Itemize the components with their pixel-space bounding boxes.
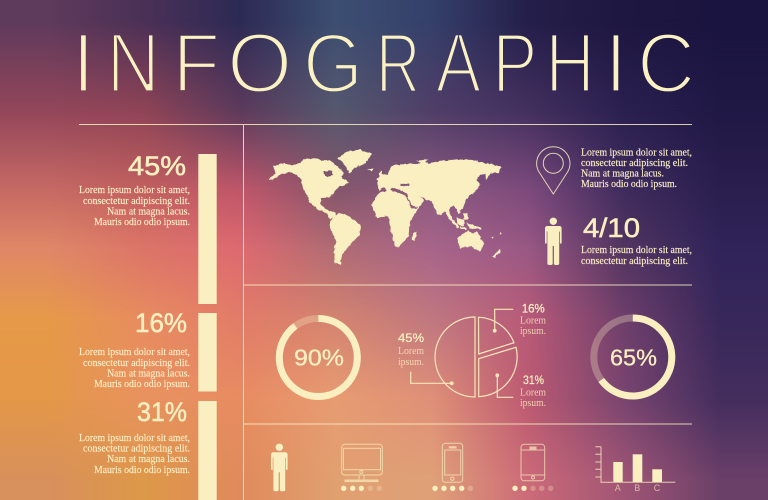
- text block: location: [581, 148, 692, 190]
- rating dots: phone: [432, 486, 473, 491]
- pie label 16%: Lorem: [520, 316, 546, 326]
- title: A: [436, 17, 481, 111]
- pie label 31%: 31%: [523, 373, 544, 387]
- icon: location pin: [537, 147, 570, 194]
- title: O: [227, 16, 292, 110]
- text block 31: consectetur adipiscing elit.: [83, 444, 190, 454]
- title: I: [72, 16, 95, 110]
- text block 16: Nam at magna lacus.: [107, 368, 190, 380]
- bar chart: C: [654, 483, 661, 493]
- bar 16: [198, 313, 217, 392]
- text block 16: [79, 347, 190, 390]
- panel: left percentages: [79, 151, 217, 500]
- donut 65%: [594, 318, 672, 396]
- donut 90%: [279, 318, 357, 396]
- stat 16%: 16%: [135, 308, 187, 338]
- bar chart: A: [615, 483, 621, 493]
- icon: phone: [442, 443, 463, 482]
- text block 16: Lorem ipsum dolor sit amet,: [79, 347, 190, 358]
- title: N: [106, 16, 160, 110]
- text block 45: consectetur adipiscing elit.: [83, 196, 190, 207]
- text block 45: [79, 185, 190, 228]
- rating dots: tablet: [512, 486, 553, 491]
- title: P: [492, 17, 537, 111]
- bar chart: B: [634, 483, 640, 493]
- pie label 16%: [520, 302, 546, 337]
- text block: location: Nam at magna lacus.: [581, 168, 664, 180]
- donut 65%: 65%: [610, 345, 657, 371]
- text block: location: consectetur adipiscing elit.: [581, 158, 688, 169]
- text block 45: Mauris odio odio ipsum.: [94, 217, 190, 228]
- title: I: [604, 16, 628, 110]
- text block 31: Lorem ipsum dolor sit amet,: [79, 433, 190, 444]
- text block 16: consectetur adipiscing elit.: [83, 358, 190, 369]
- icon: person bottom: [271, 444, 288, 491]
- pie label 16%: ipsum.: [520, 326, 546, 337]
- title: C: [637, 17, 695, 111]
- text block: location: Lorem ipsum dolor sit amet,: [581, 148, 692, 158]
- text block 31: Nam at magna lacus.: [107, 454, 190, 465]
- pie label 45%: Lorem: [398, 346, 424, 357]
- title: R: [376, 16, 420, 110]
- pie label 45%: ipsum.: [398, 357, 424, 368]
- icon: person: [545, 218, 562, 265]
- text block: 4/10: [581, 245, 692, 267]
- title: G: [303, 17, 363, 111]
- donut 90%: 90%: [294, 345, 344, 371]
- title: F: [173, 17, 220, 111]
- bar 45: [198, 154, 217, 304]
- text block 45: Nam at magna lacus.: [107, 206, 190, 218]
- rating dots: monitor: [341, 486, 382, 491]
- pie label 31%: ipsum.: [520, 398, 546, 409]
- text block 16: Mauris odio odio ipsum.: [94, 379, 190, 390]
- stat 4/10: 4/10: [583, 213, 640, 243]
- stat 31%: 31%: [137, 397, 187, 427]
- text block 31: [79, 433, 190, 476]
- icon: monitor: [342, 444, 382, 482]
- text block 31: Mauris odio odio ipsum.: [94, 465, 190, 476]
- stat 45%: 45%: [128, 151, 186, 181]
- text block: 4/10: Lorem ipsum dolor sit amet,: [581, 245, 692, 256]
- icon: tablet: [521, 444, 545, 481]
- bar 31: [198, 401, 217, 500]
- pie label 45%: [398, 331, 424, 368]
- pie chart: [411, 309, 517, 397]
- title: [81, 34, 690, 92]
- bar chart: [595, 447, 675, 493]
- text block: 4/10: consectetur adipiscing elit.: [581, 256, 688, 267]
- title: H: [546, 17, 595, 111]
- text block: location: Mauris odio odio ipsum.: [581, 179, 677, 190]
- pie label 45%: 45%: [398, 331, 424, 345]
- pie label 31%: Lorem: [520, 388, 546, 399]
- text block 45: Lorem ipsum dolor sit amet,: [79, 185, 190, 196]
- pie label 16%: 16%: [522, 302, 545, 316]
- pie label 31%: [520, 373, 546, 409]
- world map: [268, 149, 502, 264]
